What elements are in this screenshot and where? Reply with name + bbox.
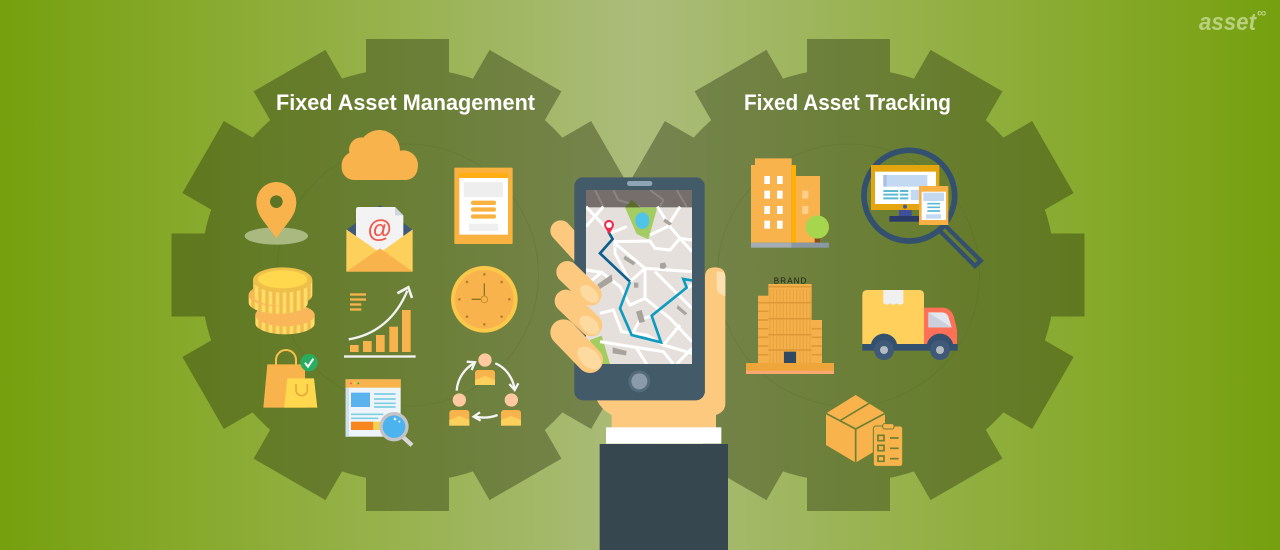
management icons — [245, 130, 521, 445]
icon: location pin — [245, 182, 308, 245]
icon: brand tower — [746, 277, 834, 374]
label: brand: BRAND — [774, 277, 808, 286]
icon: magnifier with devices — [864, 150, 981, 266]
icon: web page search — [346, 379, 412, 445]
jacket sleeve — [600, 444, 728, 550]
icon: growth chart — [344, 287, 416, 358]
logo: asset: asset — [1199, 9, 1257, 36]
gear: fixed asset management — [172, 39, 644, 511]
icon: email envelope — [346, 205, 413, 272]
phone speaker — [627, 181, 652, 186]
icon: coin stack — [249, 267, 315, 334]
thumb highlight — [717, 271, 725, 296]
title: fixed asset management: Fixed Asset Management — [276, 90, 536, 115]
hand holding phone — [561, 177, 728, 550]
icon: clock — [451, 266, 518, 333]
icon: tablet form — [454, 168, 513, 244]
icon: shopping bags — [263, 350, 318, 408]
logo: asset: ∞ — [1257, 5, 1266, 20]
shirt cuff — [606, 427, 721, 444]
gear: fixed asset tracking — [612, 39, 1084, 511]
icon: office building — [751, 158, 829, 248]
icon: delivery truck — [862, 290, 958, 360]
tracking icons — [746, 150, 981, 466]
icon: cloud — [342, 130, 418, 180]
gears — [172, 39, 1084, 511]
route — [600, 232, 630, 282]
palm and thumb — [597, 267, 725, 428]
phone body — [574, 177, 705, 400]
front fingers — [563, 272, 606, 374]
home button — [628, 370, 650, 392]
icon: email envelope: @ — [368, 216, 392, 243]
icon: box and checklist — [826, 395, 903, 466]
icon: team cycle — [449, 353, 521, 426]
index finger — [561, 231, 585, 257]
title: fixed asset tracking: Fixed Asset Tracking — [744, 90, 951, 115]
phone screen map — [586, 190, 693, 364]
map pin — [604, 220, 614, 234]
